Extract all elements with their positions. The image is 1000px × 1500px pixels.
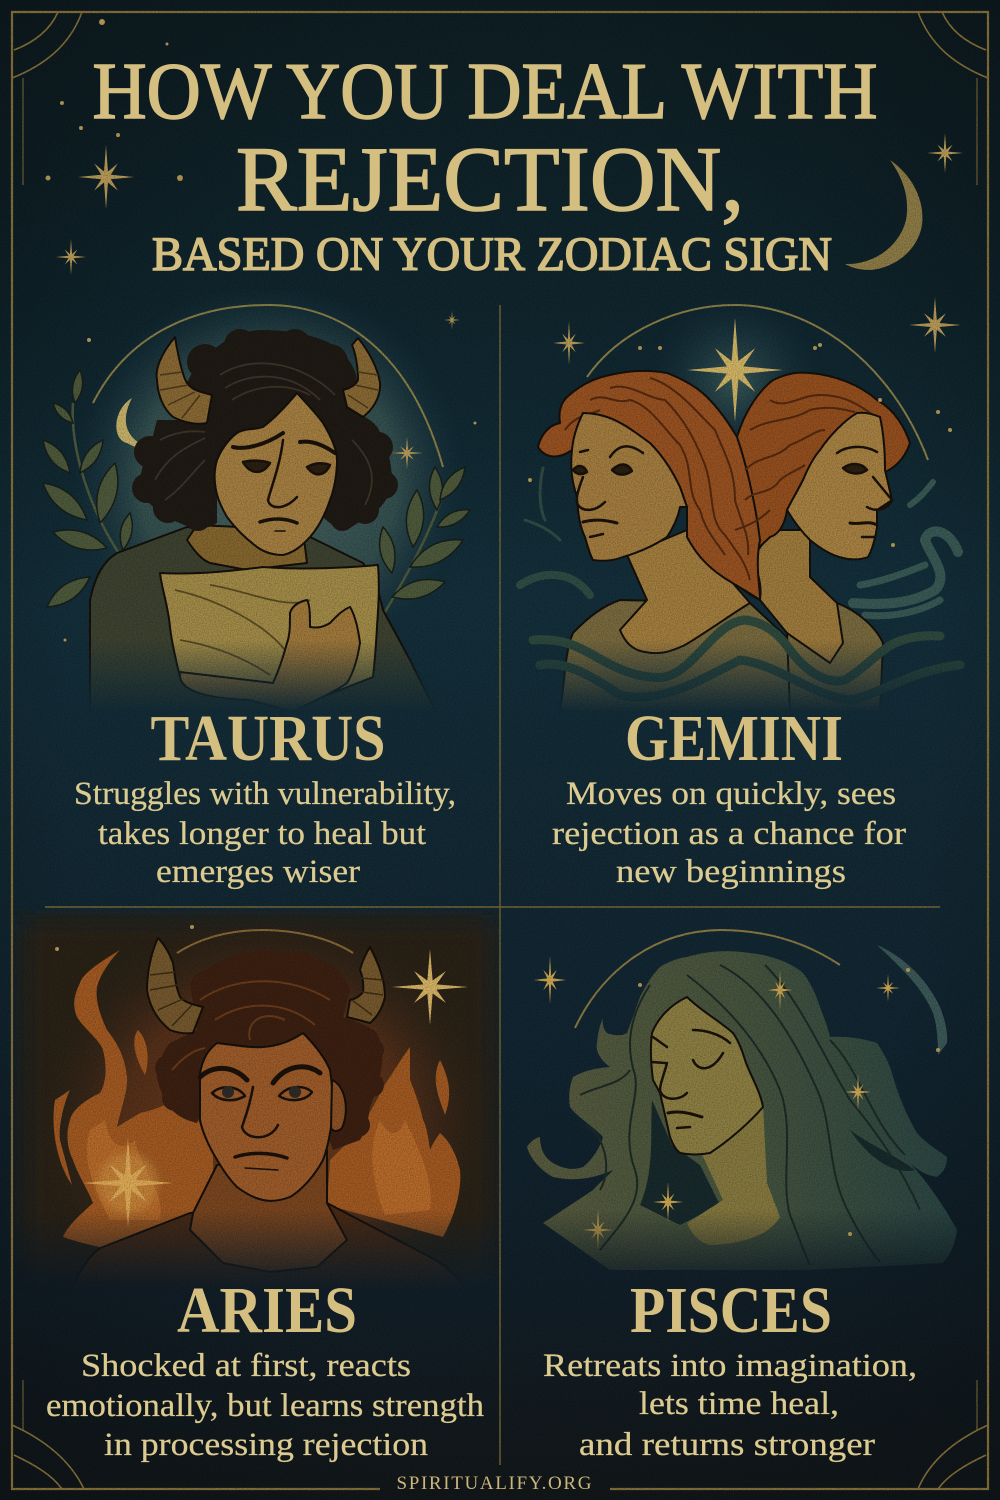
background stars [46, 19, 963, 1236]
title [92, 48, 878, 281]
aries inner flames [87, 1120, 431, 1220]
pisces dark gaps [640, 1100, 915, 1225]
heading: aries: ARIES [177, 1274, 357, 1347]
taurus facial features [233, 433, 335, 531]
footer: SPIRITUALIFY.ORG [396, 1473, 592, 1494]
gemini left garment [561, 599, 788, 706]
panel: gemini illustration [520, 290, 960, 712]
gemini left hair [538, 371, 760, 600]
text: taurus description: takes longer to heal but [98, 816, 426, 852]
gemini right neck [753, 530, 843, 663]
taurus neck [187, 525, 307, 570]
aries eyes [222, 1086, 301, 1098]
aries flames [54, 950, 460, 1254]
panel: aries illustration [20, 910, 500, 1330]
text: pisces description: Retreats into imagination, [543, 1348, 917, 1384]
text: taurus description: Struggles with vulnerability, [74, 776, 456, 812]
gemini left neck [620, 530, 750, 653]
heading: taurus: TAURUS [150, 702, 386, 775]
aries facial features [200, 1067, 320, 1170]
aries hair strands [172, 981, 330, 1070]
text: aries description: in processing rejection [104, 1427, 428, 1463]
taurus leaves [43, 370, 470, 612]
taurus hair strands [155, 363, 372, 505]
text: pisces description: and returns stronger [579, 1427, 875, 1463]
text: gemini description: Moves on quickly, sees [566, 776, 896, 812]
aries hair [155, 951, 384, 1150]
gemini right hair [720, 373, 910, 600]
heading: pisces: PISCES [630, 1274, 832, 1347]
panel: pisces illustration [527, 930, 957, 1270]
grid dividers [45, 305, 940, 1465]
taurus face [215, 393, 337, 555]
icon: aries top star [392, 949, 468, 1025]
pisces stars [534, 956, 900, 1250]
text: gemini description: rejection as a chance for [552, 816, 906, 852]
gemini foreground waves [533, 620, 960, 700]
pisces neck [687, 1105, 780, 1245]
pisces hair [527, 951, 957, 1270]
aries face [200, 1033, 333, 1201]
icon: pisces crescent [877, 945, 947, 1055]
text: taurus description [74, 776, 456, 890]
gemini hair strands [565, 378, 880, 580]
title: BASED ON YOUR ZODIAC SIGN [152, 228, 832, 281]
pisces hair strands [580, 965, 920, 1265]
gemini left face [571, 413, 687, 561]
taurus horn right [343, 338, 380, 417]
aries neck and chest [190, 1150, 347, 1272]
text: aries description: emotionally, but learns strength [46, 1388, 485, 1424]
title: REJECTION, [236, 128, 744, 230]
taurus hair [132, 329, 398, 531]
pisces facial features [652, 1030, 730, 1128]
gemini right garment [787, 603, 883, 712]
aries ear [331, 1080, 346, 1131]
icon: gemini star [687, 318, 783, 422]
title: HOW YOU DEAL WITH [92, 48, 878, 136]
taurus pillow creases [175, 585, 310, 675]
icon: aries left star [83, 1138, 173, 1228]
text: aries description [46, 1348, 485, 1463]
gemini right facial features [837, 447, 892, 537]
text: gemini description: new beginnings [616, 854, 846, 890]
gemini left waves [520, 468, 590, 595]
panel: taurus illustration [43, 280, 470, 712]
text: aries description: Shocked at first, reacts [81, 1348, 411, 1384]
text: gemini description [552, 776, 906, 890]
taurus hand [180, 600, 360, 712]
gemini right face [787, 413, 892, 559]
aries horn right [347, 947, 385, 1023]
gemini right waves [853, 482, 958, 616]
aries horn left [147, 938, 203, 1033]
text: pisces description [543, 1348, 917, 1463]
taurus horn left [157, 337, 212, 424]
icon: crescent moon [845, 160, 922, 270]
taurus body [90, 527, 436, 712]
text: taurus description: emerges wiser [156, 854, 360, 890]
taurus pillow [160, 565, 379, 707]
gemini left facial features [573, 446, 643, 537]
heading: gemini: GEMINI [625, 702, 843, 775]
text: pisces description: lets time heal, [639, 1386, 839, 1422]
aries shoulders [70, 1203, 468, 1295]
icon: taurus crescent moon [116, 398, 138, 446]
pisces face [651, 997, 763, 1154]
